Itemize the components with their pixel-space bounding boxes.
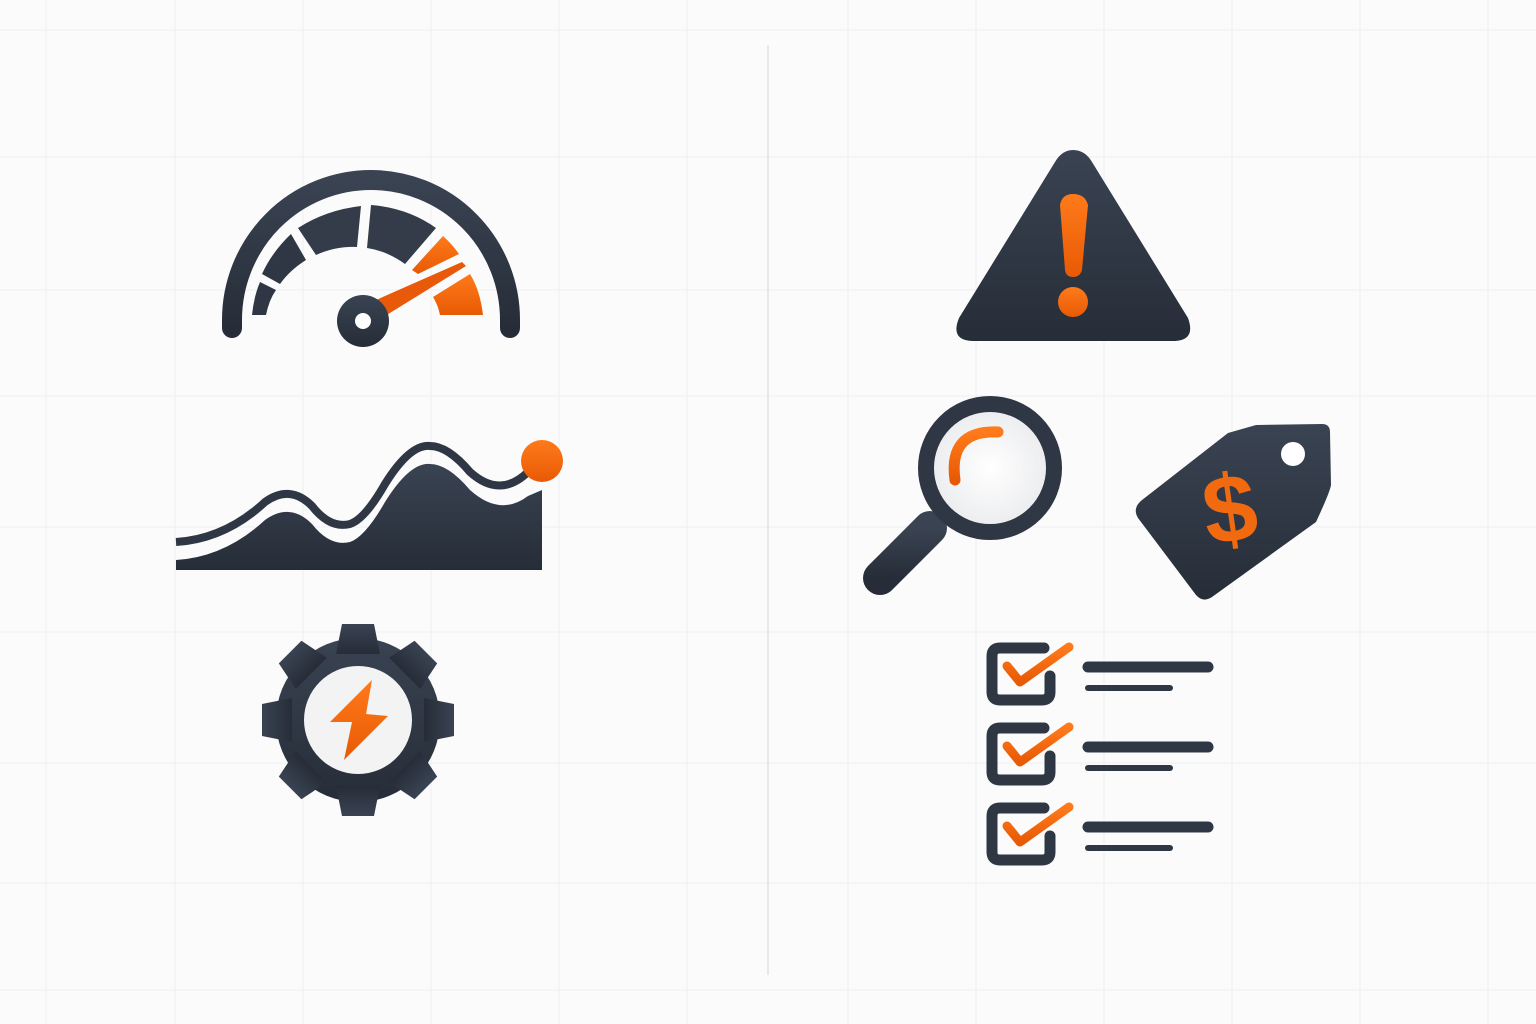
icon: gear with bolt bbox=[262, 624, 454, 816]
icon: price tag bbox=[1136, 424, 1331, 600]
icon: line chart bbox=[176, 440, 563, 570]
icon: speedometer bbox=[232, 180, 510, 347]
icon: warning triangle bbox=[956, 150, 1190, 341]
icon: price tag: $ bbox=[1196, 453, 1264, 566]
icon: magnifying glass bbox=[880, 404, 1054, 578]
icon: checklist bbox=[992, 647, 1208, 860]
